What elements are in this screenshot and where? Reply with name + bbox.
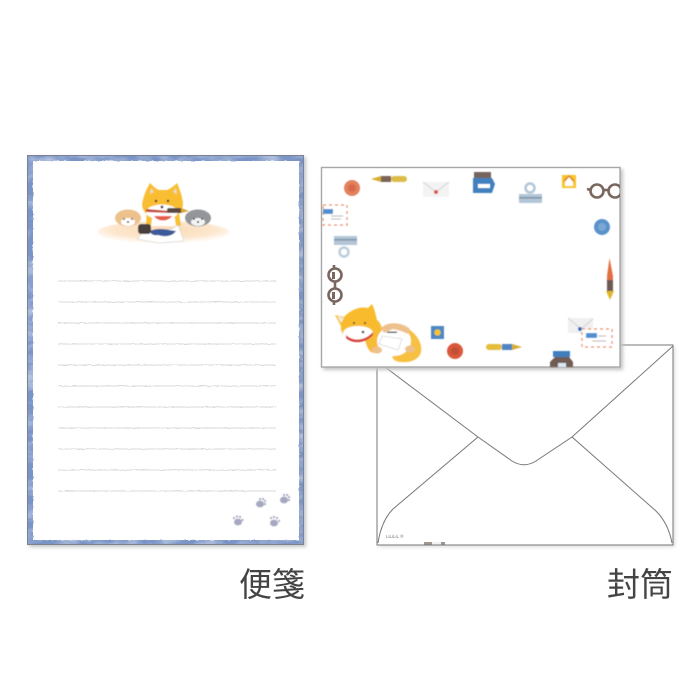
envelope in mouth bbox=[379, 336, 402, 350]
card sheet bbox=[322, 168, 620, 367]
tan shiba head fur bbox=[381, 323, 410, 334]
icon: sealed envelope blue bbox=[568, 318, 593, 333]
card: envelope front bbox=[322, 168, 623, 370]
icon: yellow house stamp bbox=[562, 175, 576, 188]
orange shiba head bbox=[335, 304, 378, 341]
letter sheet shadow bbox=[29, 157, 306, 547]
label: envelope: 封筒 bbox=[607, 566, 673, 603]
envelope maker mark: LiLiLiL ® bbox=[386, 533, 404, 539]
envelope flap lines bbox=[378, 346, 673, 543]
illustration: shiba trio at desk bbox=[97, 183, 229, 243]
icon: airmail letter left bbox=[323, 205, 347, 225]
card shadow bbox=[323, 169, 623, 370]
orange shiba with red collar bbox=[335, 304, 383, 361]
right dog head bbox=[185, 210, 211, 226]
icon: binder clip bbox=[519, 184, 542, 203]
glasses left lens hinge bbox=[332, 272, 335, 299]
icon: blue flower stamp bbox=[431, 326, 444, 339]
illustration: two shiba dogs bbox=[335, 304, 421, 362]
icon: glasses left bbox=[328, 265, 342, 305]
envelope back bbox=[377, 345, 675, 547]
icon: orange fountain pen bbox=[606, 258, 614, 300]
envelope body bbox=[377, 345, 673, 545]
envelope barcode mark bbox=[424, 542, 445, 544]
icon: blue ink bottle top bbox=[473, 172, 495, 193]
letter blue watercolor border bbox=[27, 155, 304, 545]
tan shiba paws bbox=[372, 346, 382, 354]
tan shiba white body bbox=[377, 326, 411, 356]
icon: fountain pen top bbox=[371, 176, 407, 182]
paw prints bbox=[233, 494, 290, 526]
icon: blue wax seal bbox=[594, 219, 610, 235]
letter paper bbox=[27, 155, 306, 547]
icon: glasses top right bbox=[587, 184, 622, 198]
icon: ink bottle bottom bbox=[550, 351, 573, 367]
ruled lines bbox=[58, 281, 276, 491]
label: letter paper: 便箋 bbox=[239, 566, 305, 603]
icon: red wax seal top bbox=[344, 180, 360, 196]
orange shiba flank bbox=[365, 319, 383, 353]
tan shiba tail bbox=[393, 328, 421, 362]
paper with ink spill bbox=[137, 224, 184, 243]
desk wash bbox=[97, 221, 229, 243]
letter white writing area bbox=[33, 161, 299, 540]
orange shiba white body bbox=[340, 344, 378, 361]
center shiba bbox=[142, 183, 189, 226]
tan shiba with envelope bbox=[372, 323, 421, 362]
left dog head bbox=[115, 210, 141, 226]
icon: binder clip left bbox=[334, 236, 357, 256]
icon: blue fountain pen bottom bbox=[486, 344, 522, 350]
envelope shadow bbox=[379, 347, 675, 547]
icon: sealed envelope bbox=[423, 182, 449, 197]
icon: red wax seal bottom bbox=[447, 343, 463, 359]
icon: airmail letter bottom right bbox=[582, 329, 612, 347]
